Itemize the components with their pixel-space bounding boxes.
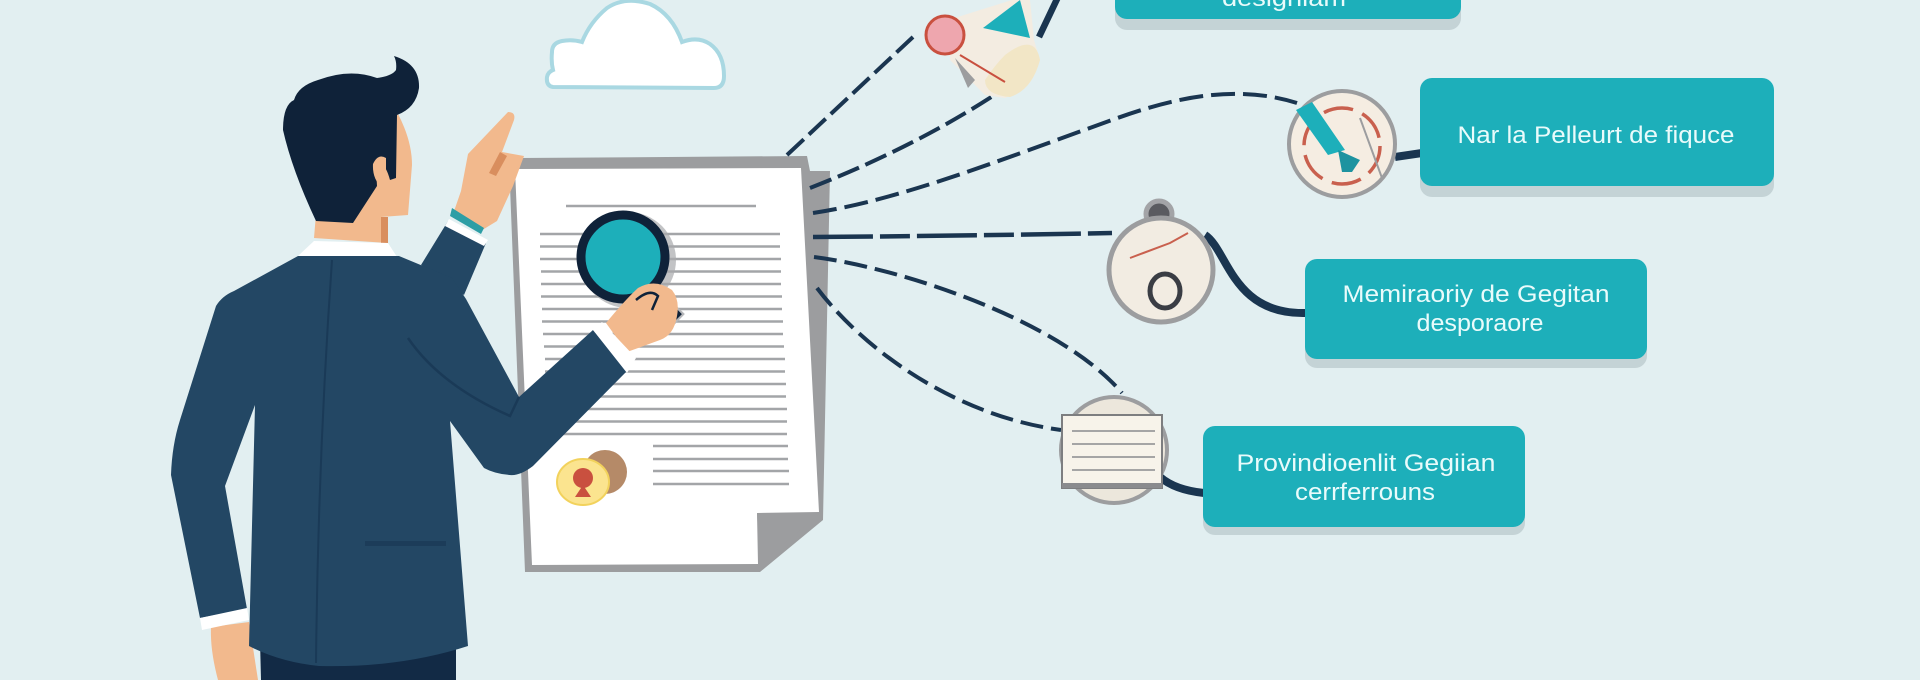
dashed connector to top icon — [787, 37, 913, 155]
icon: top illustration — [926, 0, 1040, 98]
hand holding magnifier — [593, 283, 678, 373]
dashed connector to fourth icon top — [814, 257, 1122, 393]
dashed connector to fourth icon side — [817, 288, 1061, 430]
connector to third icon — [813, 233, 1112, 237]
right cuff — [593, 322, 636, 373]
document back sheet — [510, 156, 830, 572]
icon: cloud — [547, 1, 724, 88]
document — [510, 156, 830, 572]
raised cuff — [445, 219, 488, 246]
document text lines — [540, 206, 789, 484]
solid link to second box — [1395, 153, 1422, 157]
solid link to third box — [1205, 235, 1306, 313]
dashed connector to second icon — [813, 94, 1297, 213]
neck and face — [314, 112, 412, 243]
solid link to fourth box — [1160, 477, 1204, 493]
label box: fourth: cerrferrouns — [1295, 479, 1435, 506]
jacket seams — [316, 260, 519, 663]
label box: second — [1420, 78, 1774, 197]
hair — [283, 56, 419, 223]
label box: top — [1115, 0, 1461, 30]
connectors — [787, 0, 1422, 493]
left cuff — [200, 608, 249, 630]
label box: second: Nar la Pelleurt de fiquce — [1458, 122, 1734, 149]
label box: third — [1305, 259, 1647, 368]
icon: document circle — [1061, 397, 1167, 503]
seal stamp — [557, 450, 627, 505]
jacket — [171, 256, 627, 666]
label box: third: Memiraoriy de Gegitan — [1342, 281, 1610, 308]
person — [171, 56, 627, 680]
shirt collar — [298, 241, 399, 262]
bracelet — [450, 208, 484, 234]
icon: pocket watch — [1109, 201, 1213, 322]
solid link to top box — [1039, 0, 1058, 37]
ear — [373, 156, 386, 190]
label box: fourth: Provindioenlit Gegiian — [1236, 450, 1496, 477]
trousers — [260, 640, 456, 680]
raised sleeve — [421, 221, 486, 295]
document folded corner — [757, 513, 819, 564]
label box: third: desporaore — [1416, 310, 1544, 337]
jacket pocket — [365, 541, 446, 546]
dashed connector to top icon underside — [810, 88, 1005, 188]
document page — [515, 168, 819, 565]
magnifying glass — [580, 212, 680, 319]
label box: fourth — [1203, 426, 1525, 535]
icon: gauge circle — [1289, 91, 1395, 197]
raised hand — [452, 112, 524, 232]
left hand — [211, 622, 258, 680]
